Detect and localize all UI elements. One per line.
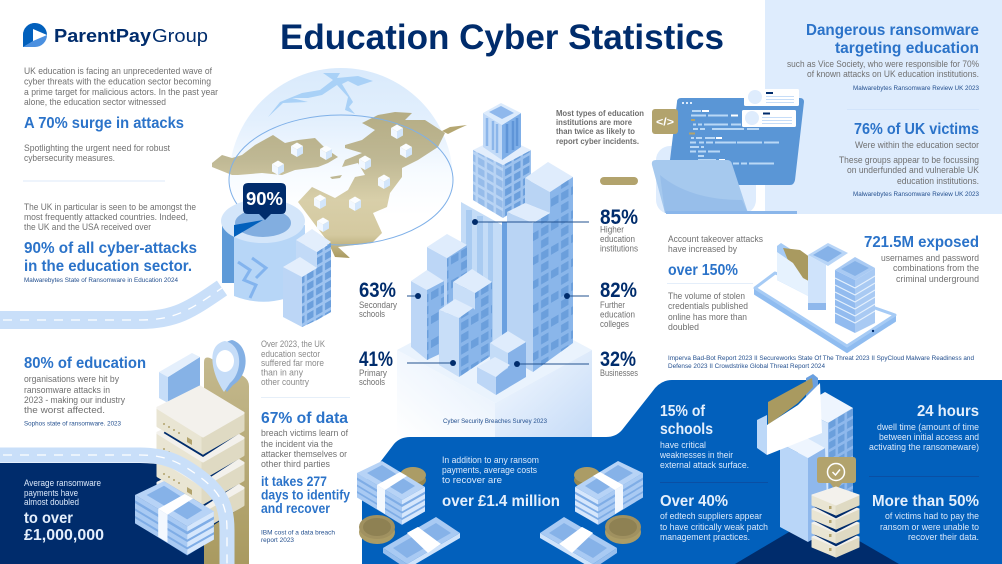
stat: 41% primary schools: Primary <box>359 368 387 379</box>
stat: 67% of data <box>261 410 350 544</box>
spotlight text <box>24 143 170 164</box>
text: 76% of UK victims: education institutions. <box>897 176 979 187</box>
stat: 82% further education: Further <box>600 300 625 311</box>
intro paragraph: alone, the education sector witnessed <box>24 97 166 108</box>
stat: 80% of education: 2023 - making our industry <box>24 395 125 406</box>
stat: 63% secondary schools: schools <box>359 309 385 320</box>
stat: 67% of data: attacker themselves or <box>261 449 347 460</box>
text: most types of education institutions: than twice as likely to <box>556 126 635 136</box>
front data stack <box>826 257 875 333</box>
intro paragraph: UK education is facing an unprecedented wave of <box>24 66 212 77</box>
sources: account takeover <box>668 355 974 370</box>
text: account takeover <box>668 234 763 333</box>
stat: 85% higher education: Higher <box>600 224 624 236</box>
source: Malwarebytes State of Ransomware in Education 2024 <box>24 277 178 284</box>
book <box>159 353 200 403</box>
text: most types of education institutions <box>556 108 644 146</box>
text: account takeover: credentials published <box>668 301 748 312</box>
stat: 277 days: days to identify <box>261 488 350 502</box>
stat: 82% further education: 82% <box>600 279 637 302</box>
illustration: city skyline on pedestal <box>397 103 592 437</box>
stat: 32% businesses: Businesses <box>600 368 638 379</box>
stat: 24 hours: between initial access and <box>879 432 979 443</box>
navy floor triangle <box>735 516 899 564</box>
low front block <box>477 331 526 395</box>
text: UK suffered more: Over 2023, the UK <box>261 339 326 350</box>
illustration: globe with UK map <box>212 68 467 258</box>
stat: over £1.4 million: over £1.4 million <box>442 493 560 510</box>
stat: 15% of schools <box>659 403 749 471</box>
stat: 24 hours: 24 hours <box>917 403 979 420</box>
mini servers <box>812 487 859 559</box>
cylinder crack <box>238 262 256 298</box>
text: ransomware payments: almost doubled <box>24 497 79 508</box>
stat: 24 hours: activating the ransomeware) <box>869 442 979 453</box>
cylinder left piece <box>222 222 234 283</box>
title: Education Cyber Statistics <box>280 18 724 57</box>
stat: 32% businesses <box>600 348 638 379</box>
pale blob <box>656 146 756 214</box>
code brackets badge <box>652 109 678 134</box>
text: account takeover: online has more than <box>668 312 747 323</box>
clock badge <box>817 457 856 491</box>
central tower <box>461 103 531 345</box>
source: Malwarebytes Ransomware Review UK 2023 <box>853 191 979 198</box>
leader line: 63% <box>407 293 421 299</box>
stat: 721.5M exposed: usernames and password <box>881 253 979 264</box>
text: most types of education institutions: report cyber incidents. <box>556 136 639 146</box>
folder and file <box>757 374 822 455</box>
tower <box>780 392 853 542</box>
stat: over 40% <box>660 493 768 543</box>
stat: over £1,000,000: £1,000,000 <box>24 527 104 544</box>
text: most types of education institutions: institutions are more <box>556 117 632 127</box>
leader line: 85% <box>472 219 589 225</box>
stat: 82% further education <box>600 279 637 330</box>
server layers <box>158 387 243 529</box>
logo wordmark: Group <box>152 26 208 46</box>
stat: 90% of attacks <box>24 240 197 275</box>
stat: 63% secondary schools <box>359 279 397 320</box>
profile card 1 <box>744 89 799 106</box>
source: report 2023 <box>261 537 294 544</box>
text: cost to recover: payments, average costs <box>442 465 537 476</box>
spotlight text: Spotlighting the urgent need for robust <box>24 143 170 154</box>
text: dangerous ransomware <box>787 22 979 92</box>
text: ransomware payments: payments have <box>24 488 78 499</box>
map land: east <box>298 112 445 258</box>
stat: 90% of attacks: 90% of all cyber-attacks <box>24 240 197 257</box>
stat: 721.5M exposed: 721.5M exposed <box>864 234 979 251</box>
lightning crack on globe <box>268 73 373 117</box>
text: account takeover: doubled <box>668 322 699 333</box>
sources: account takeover: Defense 2023 II Crowdstrike Global Threat Report 2024 <box>668 363 825 370</box>
text: UK suffered more: suffered far more <box>261 358 324 369</box>
logo icon <box>23 23 47 47</box>
leader line: 32% <box>514 361 589 367</box>
text: UK suffered more <box>261 339 326 388</box>
text: dangerous ransomware: of known attacks on UK education institutions. <box>807 69 979 80</box>
dark pie wedge <box>234 220 263 237</box>
illustration: laptop with code <box>652 89 804 214</box>
cylinder body <box>234 225 305 302</box>
text: account takeover: The volume of stolen <box>668 291 745 302</box>
stat: 41% primary schools <box>359 348 393 388</box>
laptop lid <box>652 160 797 214</box>
middle block <box>453 269 492 365</box>
UK paragraph: most frequently attacked countries. Indeed, <box>24 212 188 223</box>
source: breaches survey: Cyber Security Breaches Survey 2023 <box>443 418 547 425</box>
left back block <box>427 234 467 340</box>
folder with tan file <box>777 243 820 302</box>
stat: 85% higher education <box>600 206 638 254</box>
stat: 15% of schools: schools <box>660 421 713 438</box>
globe <box>229 68 453 245</box>
road: top left <box>0 288 222 320</box>
intro paragraph: a prime target for malicious actors. In the past year <box>24 87 218 98</box>
navy panel: ransom payments background <box>0 463 220 564</box>
left front block <box>411 270 444 360</box>
stat: more than 50%: recover their data. <box>908 532 979 543</box>
text: cost to recover: In addition to any ransom <box>442 455 539 466</box>
source <box>261 530 335 544</box>
phone slab <box>755 273 895 352</box>
stat: 85% higher education: 85% <box>600 206 638 229</box>
illustration: money and coins, left <box>357 461 460 564</box>
stat: 721.5M exposed: combinations from the <box>893 263 979 274</box>
leader line: 41% <box>407 360 456 366</box>
map land: small islands <box>330 125 467 179</box>
text: dangerous ransomware: targeting education <box>835 40 979 57</box>
map cubes <box>272 124 412 232</box>
stat: 82% further education: education <box>600 310 635 320</box>
tall right building <box>507 162 573 372</box>
orbit ring <box>229 115 453 245</box>
UK paragraph: The UK in particular is seen to be amongst the <box>24 202 196 213</box>
source: Malwarebytes Ransomware Review UK 2023 <box>853 85 979 92</box>
stat: more than 50%: More than 50% <box>872 493 979 510</box>
stat: 80% of education <box>24 355 146 428</box>
front block <box>439 299 492 377</box>
stat: 15% of schools: external attack surface. <box>660 460 749 471</box>
intro paragraph <box>24 66 218 108</box>
source: IBM cost of a data breach <box>261 530 335 536</box>
text: 76% of UK victims: 76% of UK victims <box>854 121 979 138</box>
stat: 277 days <box>261 474 350 516</box>
tan backing panel <box>204 358 249 564</box>
text: account takeover: have increased by <box>668 244 737 255</box>
text: account takeover: Account takeover attacks <box>668 234 763 245</box>
logo <box>23 23 208 47</box>
text: dangerous ransomware: such as Vice Society, who were responsible for 70% <box>787 59 979 70</box>
tan pill <box>600 177 638 185</box>
text: 76% of UK victims: on underfunded and vulnerable UK <box>847 165 980 176</box>
90% bubble: 90% <box>246 189 283 209</box>
illustration: tower with clock and servers <box>735 374 899 564</box>
text: UK suffered more: education sector <box>261 349 320 360</box>
cylinder top <box>221 199 305 243</box>
stat: 85% higher education: institutions <box>600 244 638 254</box>
stat: more than 50% <box>872 493 979 543</box>
stat: over 40%: management practices. <box>660 532 750 543</box>
logo wordmark: ParentPay <box>54 26 151 46</box>
back data stack <box>808 243 848 310</box>
stat: 15% of schools: weaknesses in their <box>659 450 733 461</box>
text: ransomware payments <box>24 478 104 544</box>
stat: more than 50%: of victims had to pay the <box>885 511 979 522</box>
stat: 70% surge: A 70% surge in attacks <box>24 115 184 132</box>
stat: 67% of data: the incident via the <box>261 439 333 450</box>
illustration: server stack with pin and book <box>158 340 249 564</box>
code brackets badge: </> <box>656 116 674 128</box>
top-right panel background <box>765 0 1002 214</box>
intro paragraph: cyber threats with the education sector becoming <box>24 76 211 88</box>
spotlight text: cybersecurity measures. <box>24 153 115 164</box>
text: UK suffered more: other country <box>261 377 309 388</box>
illustration: money and coins, right <box>540 461 643 564</box>
stat: 90% of attacks: in the education sector. <box>24 258 192 275</box>
source: Sophos state of ransomware. 2023 <box>24 420 121 428</box>
stat: 67% of data: 67% of data <box>261 410 348 427</box>
leader line: 82% <box>564 293 589 299</box>
stat: 277 days: it takes 277 <box>261 474 327 489</box>
code lines <box>682 102 779 164</box>
stat: 85% higher education: education <box>600 234 635 245</box>
pedestal <box>397 298 592 437</box>
stat: 67% of data: breach victims learn of <box>261 428 348 439</box>
road: lower left <box>0 455 227 564</box>
stat: 32% businesses: 32% <box>600 348 636 371</box>
intro text <box>24 66 218 164</box>
profile card 2 <box>742 110 796 127</box>
map land: west <box>212 135 338 175</box>
illustration: 90% pie cylinder <box>221 183 305 302</box>
stat: 80% of education: ransomware attacks in <box>24 385 110 396</box>
illustration: phone with folder and data <box>755 243 895 352</box>
stat: over £1,000,000 <box>24 510 104 544</box>
stat: 15% of schools: have critical <box>660 440 706 451</box>
screen <box>670 98 804 185</box>
map pin <box>212 340 246 392</box>
stat: over 40%: of edtech suppliers appear <box>660 511 762 522</box>
text: 76% of UK victims <box>839 121 980 198</box>
stat: 63% secondary schools: 63% <box>359 279 396 302</box>
stat: 24 hours: dwell time (amount of time <box>877 422 979 433</box>
stat: 41% primary schools: 41% <box>359 348 393 371</box>
stat: 67% of data: other third parties <box>261 459 330 470</box>
stat: 721.5M exposed: criminal underground <box>896 274 979 285</box>
stat: 41% primary schools: schools <box>359 377 385 388</box>
stat: over £1,000,000: to over <box>24 510 73 527</box>
stat: 24 hours <box>869 403 979 453</box>
stat: 63% secondary schools: Secondary <box>359 300 397 311</box>
UK attacks text <box>24 202 197 284</box>
bottom blue panel background <box>362 380 1002 564</box>
stat: over 40%: Over 40% <box>660 493 728 510</box>
text: most types of education institutions: Most types of education <box>556 108 644 118</box>
text: cost to recover: to recover are <box>442 475 502 486</box>
stat: over 40%: to have critically weak patch <box>660 522 768 533</box>
stat: over 150%: over 150% <box>668 262 738 279</box>
illustration: small building beside cylinder <box>283 229 331 327</box>
UK paragraph: the UK and the USA received over <box>24 222 151 233</box>
illustration: money stack on road <box>135 481 214 555</box>
text: UK suffered more: than in any <box>261 368 303 378</box>
text: ransomware payments: Average ransomware <box>24 478 101 489</box>
stat: 80% of education: organisations were hit by <box>24 374 119 385</box>
text: dangerous ransomware: Dangerous ransomware <box>806 22 979 39</box>
UK paragraph <box>24 202 196 233</box>
stat: 721.5M exposed <box>864 234 979 285</box>
text: 76% of UK victims: These groups appear to be focussing <box>839 155 979 166</box>
sources: account takeover: Imperva Bad-Bot Report 2023 II Secureworks State Of The Threat 2023 II SpyCloud Malware Readiness and <box>668 355 974 362</box>
text: cost to recover <box>442 455 560 510</box>
stat: 277 days: and recover <box>261 501 331 516</box>
stat: 15% of schools: 15% of <box>660 403 706 420</box>
text: 76% of UK victims: Were within the education sector <box>855 140 979 151</box>
stat: 82% further education: colleges <box>600 319 629 330</box>
stat: 80% of education: the worst affected. <box>24 405 105 416</box>
stat: 80% of education: 80% of education <box>24 355 146 372</box>
stat: more than 50%: ransom or were unable to <box>880 522 979 533</box>
